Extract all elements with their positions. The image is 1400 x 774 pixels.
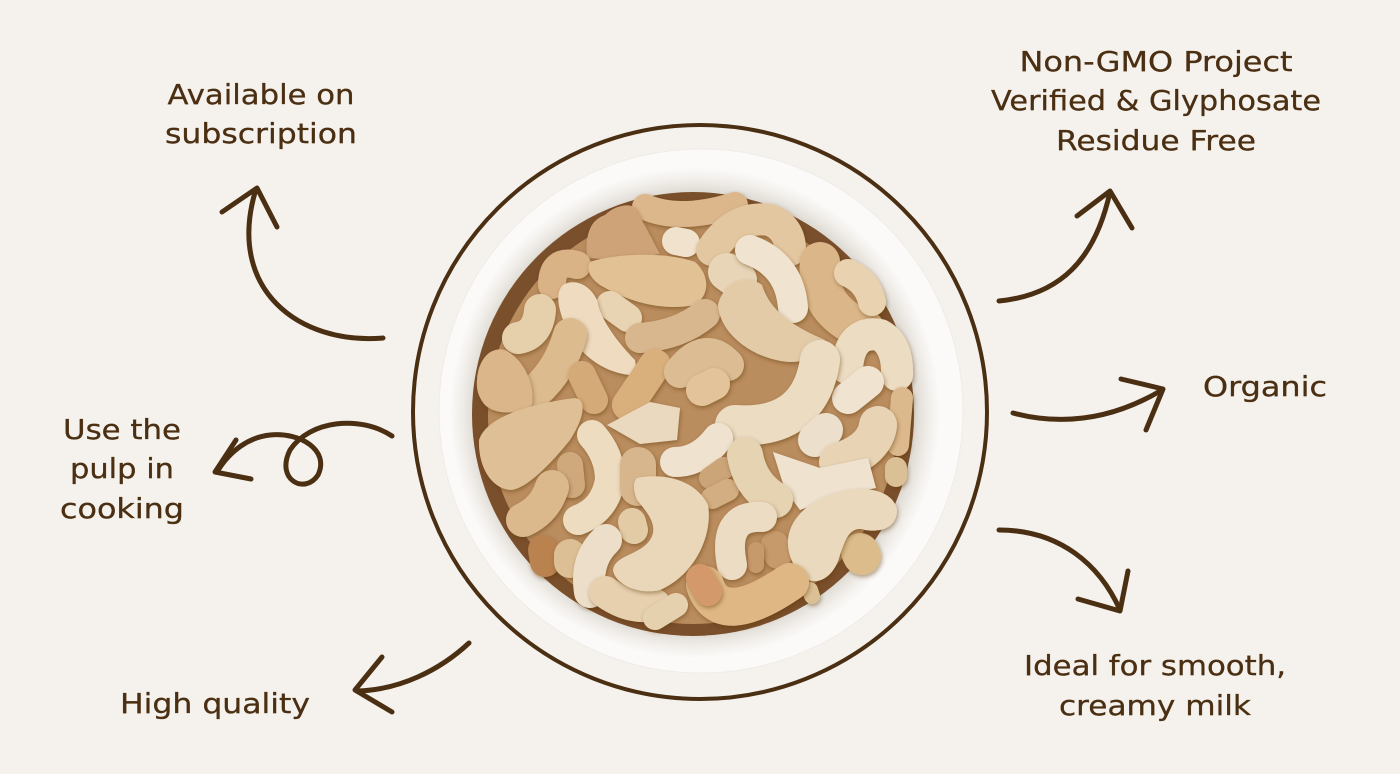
label: ideal for smooth, creamy milk: creamy milk	[1059, 689, 1252, 722]
label: non-GMO project verified: Non-GMO Project	[1020, 45, 1293, 78]
label: available on subscription: subscription	[165, 117, 357, 150]
label: available on subscription	[165, 78, 357, 150]
label: non-GMO project verified: Verified & Glyphosate	[991, 84, 1321, 117]
hidden lower cashews	[488, 208, 898, 624]
arrow: to creamy milk	[999, 530, 1128, 611]
label: use the pulp in cooking: Use the	[63, 413, 181, 446]
cashew pile	[477, 205, 902, 618]
arrow: to organic	[1013, 379, 1163, 430]
white bowl	[439, 149, 963, 673]
arrow: to high quality	[355, 643, 469, 712]
circular outline ring	[413, 125, 987, 699]
arrow: to available on subscription	[222, 188, 383, 339]
label: high quality: High quality	[120, 687, 310, 720]
bowl of cashews	[439, 149, 963, 673]
label: use the pulp in cooking: pulp in	[70, 452, 174, 485]
label: organic: Organic	[1203, 370, 1327, 403]
label: non-GMO project verified	[991, 45, 1321, 157]
bowl interior shadow	[472, 192, 914, 636]
label: ideal for smooth, creamy milk	[1024, 649, 1286, 722]
label: available on subscription: Available on	[168, 78, 354, 111]
arrow: to non-GMO	[999, 191, 1132, 301]
label: use the pulp in cooking	[60, 413, 184, 525]
label: non-GMO project verified: Residue Free	[1056, 124, 1256, 157]
bowl inner wall	[449, 167, 941, 659]
label: ideal for smooth, creamy milk: Ideal for smooth,	[1024, 649, 1286, 682]
label: use the pulp in cooking: cooking	[60, 492, 184, 525]
arrow: looped to use the pulp	[215, 423, 392, 484]
